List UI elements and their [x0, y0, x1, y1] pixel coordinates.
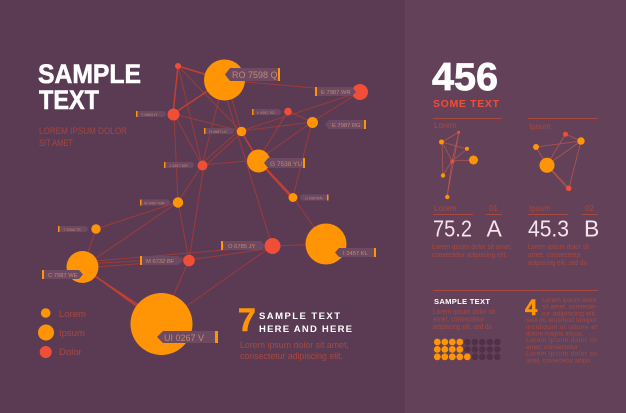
subtitle — [39, 126, 127, 148]
node: I 3457 KL — [306, 224, 346, 264]
stat: 45.3 B: Lorem ipsum dolor sit — [528, 244, 589, 251]
stat: 45.3 B: amet, consectetur — [528, 252, 582, 259]
label: I 3457 KL: I 3457 KL — [343, 251, 369, 257]
label: H 4987 LK — [204, 128, 234, 134]
text block: justified — [526, 297, 598, 364]
node: C 7987 WE — [66, 251, 98, 283]
text block: sample — [433, 309, 495, 331]
stat: 75.2 A: Lorem — [434, 204, 457, 213]
rule left — [433, 118, 502, 119]
text block: justified: Lorem ipsum dolor sit — [526, 337, 597, 344]
label: C 7987 WE: C 7987 WE — [48, 273, 78, 279]
node: T 3356 TR — [91, 224, 101, 234]
label: UI 0267 V — [157, 331, 218, 343]
label: U 3467BN: U 3467BN — [305, 196, 323, 200]
text block: sample: Lorem ipsum dolor sit — [433, 309, 495, 316]
label: E 7987 WR — [315, 87, 356, 96]
node: V 4957 SD — [284, 108, 292, 115]
label: V 4957 SD — [252, 109, 281, 115]
label: Lorem top: Lorem — [434, 121, 457, 130]
label: J 4357 WR — [164, 162, 194, 168]
node: E 7987 WR — [352, 84, 368, 100]
subtitle: SIT AMET — [39, 138, 73, 148]
rule right — [528, 118, 598, 119]
label: Y 6663 IY: Y 6663 IY — [141, 113, 158, 117]
node: H 4987 LK — [237, 127, 246, 136]
node: W 3467 WR — [173, 197, 183, 208]
label: Y 6663 IY — [136, 111, 166, 117]
node: RO 7598 Q — [204, 60, 245, 100]
label: I 3457 KL — [335, 248, 376, 257]
text block: justified: amet, consectetur — [526, 344, 579, 351]
title: TEXT — [39, 85, 99, 115]
legend: Lorem — [59, 309, 86, 320]
label: RO 7598 Q: RO 7598 Q — [232, 70, 278, 80]
node: M 6732 BF — [183, 255, 195, 266]
label: T 3356 TR: T 3356 TR — [63, 228, 81, 232]
title — [38, 59, 141, 115]
label: W 3467 WR — [140, 200, 170, 206]
node: O 6785 JY — [264, 238, 280, 254]
callout: 7 sample text: HERE AND HERE — [259, 324, 352, 335]
label: E 7987 WR: E 7987 WR — [321, 90, 351, 96]
text block: justified: Lorem ipsum dolor — [542, 297, 598, 304]
big number 456: 456 — [432, 56, 498, 99]
node: E 7987 RG — [307, 117, 318, 128]
stat: 75.2 A: A — [486, 216, 502, 242]
legend: Dolor — [59, 347, 82, 358]
numeral 4: 4 — [525, 295, 538, 320]
callout: 7 sample text — [238, 302, 352, 361]
panel: right column — [405, 0, 626, 413]
label: M 6732 BF: M 6732 BF — [146, 259, 175, 265]
text block: justified: dolore magna aliqua. — [526, 330, 583, 338]
text block: sample: amet, consectetur — [433, 316, 485, 324]
heading: some text: SOME TEXT — [433, 98, 500, 110]
node: U 3467BN — [288, 193, 298, 202]
stat: 45.3 B: B — [584, 216, 599, 242]
legend — [38, 308, 86, 358]
label: Ipsum top: Ipsum — [529, 122, 551, 131]
text block: justified: incididunt ut labore et — [526, 324, 597, 331]
node: UI 0267 V — [130, 293, 192, 355]
dot chart — [434, 339, 501, 360]
label: O 6785 JY — [221, 241, 265, 250]
callout: 7 sample text: consectetur adipiscing elit. — [240, 351, 343, 361]
text block: justified: sed do eiusmod tempor — [526, 317, 598, 324]
label: O 6785 JY: O 6785 JY — [228, 244, 256, 250]
text block: justified: amet, consectetur adipis. — [526, 357, 592, 364]
legend: Ipsum — [59, 328, 85, 339]
node: J 4357 WR — [198, 160, 208, 170]
heading: sample text: SAMPLE TEXT — [434, 297, 490, 306]
text block: justified: tur adipiscing elit, — [542, 310, 597, 317]
label: V 4957 SD: V 4957 SD — [256, 111, 275, 115]
node: top small — [175, 63, 181, 69]
mini network: right — [533, 132, 585, 191]
mini network: left — [439, 131, 478, 199]
network graph — [66, 60, 368, 355]
stat: 75.2 A: 75.2 — [433, 216, 472, 242]
stat: 75.2 A: 01 — [489, 204, 498, 213]
stat: 75.2 A: Lorem ipsum dolor sit amet, — [432, 244, 512, 251]
label: U 3467BN — [300, 194, 328, 200]
label: M 6732 BF — [140, 256, 183, 265]
stat: 75.2 A — [432, 204, 512, 259]
label: C 7987 WE — [42, 270, 83, 279]
text block: sample: adipiscing elit, sed do — [433, 324, 492, 331]
stat: 75.2 A: consectetur adipiscing elit. — [432, 252, 507, 259]
label: W 3467 WR: W 3467 WR — [144, 202, 165, 206]
label: E 7987 RG — [325, 120, 366, 129]
stat: 45.3 B: 02 — [585, 204, 594, 213]
callout: 7 sample text: Lorem ipsum dolor sit amet, — [240, 340, 349, 350]
title: SAMPLE — [38, 59, 141, 89]
label: E 7987 RG: E 7987 RG — [332, 123, 361, 129]
label: G 7538 YU — [264, 158, 305, 168]
text block: justified: sit amet, consecte- — [542, 304, 597, 311]
label: RO 7598 Q — [225, 68, 280, 81]
subtitle: LOREM IPSUM DOLOR — [39, 126, 127, 136]
stat: 45.3 B — [528, 204, 599, 267]
label: J 4357 WR: J 4357 WR — [169, 164, 188, 168]
stat: 45.3 B: Ipsum — [529, 204, 551, 213]
label: H 4987 LK: H 4987 LK — [209, 130, 227, 134]
text block: justified: Lorem ipsum dolor sit — [526, 351, 597, 358]
label: UI 0267 V: UI 0267 V — [164, 333, 204, 343]
callout: 7 sample text: 7 — [238, 302, 256, 338]
label: T 3356 TR — [58, 226, 88, 232]
rule bottom — [433, 290, 598, 291]
stat: 45.3 B: adipiscing elit, sed do — [528, 260, 587, 267]
callout: 7 sample text: SAMPLE TEXT — [259, 311, 340, 322]
node: G 7538 YU — [247, 150, 270, 172]
label: G 7538 YU: G 7538 YU — [270, 161, 302, 168]
node: Y 6663 IY — [168, 108, 180, 120]
stat: 45.3 B: 45.3 — [528, 216, 569, 242]
